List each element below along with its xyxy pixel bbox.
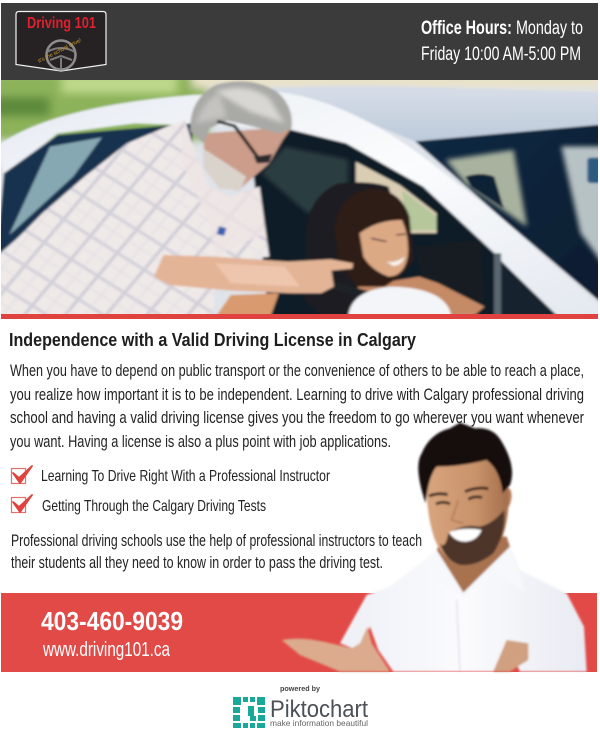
- mirror: [346, 285, 453, 314]
- shirt: [340, 545, 587, 672]
- contact band: [1, 593, 597, 672]
- intro paragraph: you want. Having a license is also a plus point with job applications.: [10, 432, 391, 451]
- instructor: [0, 81, 353, 320]
- closing paragraph: [11, 531, 422, 572]
- tagline: make information beautiful: [270, 718, 368, 728]
- icon: checkbox 2: [12, 495, 32, 512]
- left window: [0, 123, 192, 257]
- lower rear door: [499, 260, 558, 314]
- car roof: [274, 86, 598, 144]
- right hand: [493, 640, 528, 672]
- left hand: [282, 627, 390, 672]
- office hours: [421, 18, 583, 65]
- website: www.driving101.ca: [42, 639, 171, 661]
- face: [427, 450, 509, 565]
- checklist: [12, 466, 331, 515]
- eyes: [436, 502, 450, 504]
- intro paragraph: [10, 361, 584, 451]
- closing paragraph: Professional driving schools use the help of professional instructors to teach: [11, 531, 422, 550]
- logo: Driving 101 badge: It's the school drive!: [37, 37, 83, 65]
- logo: Driving 101 badge: [16, 12, 106, 71]
- phone number: 403-460-9039: [41, 606, 183, 636]
- car interior: [254, 128, 494, 320]
- foliage: [0, 73, 600, 140]
- closing paragraph: their students all they need to know in order to pass the driving test.: [11, 553, 383, 572]
- item 2: Getting Through the Calgary Driving Tests: [42, 498, 266, 515]
- smiling man presenting: [282, 423, 587, 672]
- outside view through window: [356, 162, 437, 233]
- logo: Driving 101 badge: Driving 101: [27, 15, 96, 32]
- hero photo: instructor and student at car: [0, 73, 600, 323]
- headrest and seat: [303, 180, 392, 314]
- ear: [503, 488, 512, 512]
- heading: Independence with a Valid Driving License in Calgary: [9, 329, 417, 350]
- header bar: [1, 3, 598, 80]
- icon: Piktochart mark: [233, 697, 265, 728]
- item 1: Learning To Drive Right With a Professional Instructor: [41, 468, 331, 485]
- powered by: powered by: [280, 686, 320, 693]
- hair: [418, 423, 512, 503]
- nose: [452, 500, 463, 523]
- rear glass: [415, 124, 600, 308]
- beard: [440, 510, 504, 565]
- Piktochart wordmark: Piktochart: [270, 696, 368, 723]
- car body and pillar: [1, 92, 575, 303]
- red divider: [1, 314, 598, 319]
- icon: checkbox 1: [12, 466, 32, 484]
- neck: [437, 537, 510, 593]
- footer: powered by Piktochart: [233, 686, 368, 728]
- student: [327, 188, 485, 320]
